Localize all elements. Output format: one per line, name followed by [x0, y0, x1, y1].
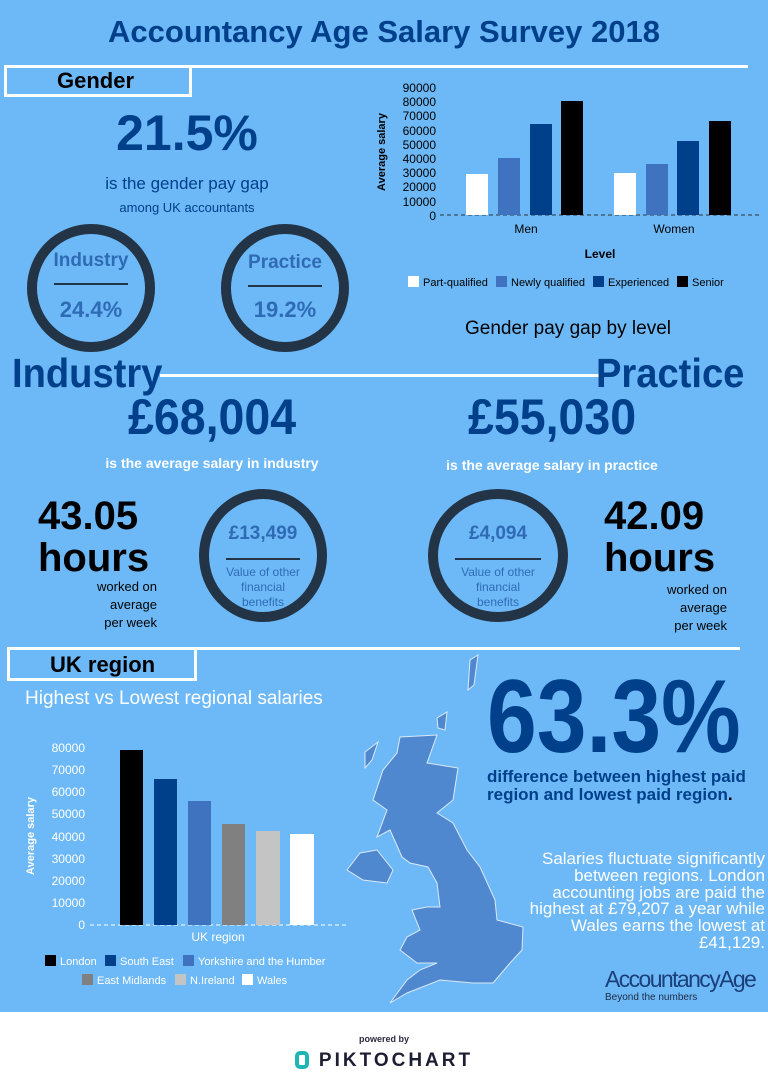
stat: practice salary: £55,030: [468, 389, 636, 445]
bar chart: regional salaries: 60000: [52, 785, 85, 799]
text: is the average salary in practice: [446, 457, 658, 473]
bar chart: gender pay gap by level: Experienced: [608, 277, 669, 289]
bar chart: regional salaries: [25, 741, 346, 987]
circle: practice benefits: £4,094: [469, 523, 527, 544]
map: UK: [346, 654, 524, 1004]
text: difference between highest paid: [487, 767, 746, 786]
bar chart: regional salaries: East Midlands: [97, 975, 167, 987]
heading: Gender: [4, 65, 192, 97]
circle: practice benefits: Value of other: [461, 565, 535, 579]
stat: industry hours: hours: [38, 536, 149, 580]
title: Accountancy Age Salary Survey 2018: [108, 14, 660, 49]
heading: UK region: [7, 647, 197, 681]
bar chart: gender pay gap by level: 60000: [403, 124, 436, 138]
heading: Industry: Industry: [12, 350, 162, 396]
bar chart: gender pay gap by level: 40000: [403, 152, 436, 166]
bar chart: regional salaries: Yorkshire and the Humber: [198, 956, 326, 968]
bar chart: regional salaries: 20000: [52, 874, 85, 888]
bar chart: regional salaries: 10000: [52, 896, 85, 910]
circle: practice gap: [221, 224, 349, 352]
stat: practice hours: per week: [674, 618, 727, 633]
circle: industry benefits: [199, 489, 327, 622]
heading: Practice: Practice: [596, 350, 744, 396]
footer: piktochart: powered by: [359, 1034, 409, 1044]
text block: regional summary: Wales earns the lowest at: [571, 916, 765, 935]
bar chart: regional salaries: 80000: [52, 741, 85, 755]
circle: practice benefits: financial: [476, 580, 520, 594]
bar chart: regional salaries: Wales: [257, 975, 288, 987]
bar chart: gender pay gap by level: Level: [585, 247, 615, 261]
bar chart: regional salaries: 0: [78, 918, 85, 932]
bar chart: gender pay gap by level: Average salary: [376, 112, 388, 191]
bar chart: gender pay gap by level: 50000: [403, 138, 436, 152]
bar chart: gender pay gap by level: Senior: [692, 277, 724, 289]
subheading: Highest vs Lowest regional salaries: [25, 688, 323, 709]
stat: practice hours: average: [680, 600, 727, 615]
bar chart: gender pay gap by level: Gender pay gap by level: [465, 318, 671, 339]
bar chart: gender pay gap by level: Men: [514, 222, 538, 236]
bar chart: gender pay gap by level: Newly qualified: [511, 277, 585, 289]
text block: regional summary: [530, 849, 765, 952]
bar chart: regional salaries: UK region: [191, 930, 245, 944]
bar chart: regional salaries: 50000: [52, 807, 85, 821]
heading: UK region: UK region: [50, 652, 155, 677]
bar chart: regional salaries: South East: [120, 956, 174, 968]
bar chart: gender pay gap by level: Part-qualified: [423, 277, 488, 289]
stat: practice hours: 42.09: [604, 494, 704, 538]
stat: industry hours: 43.05: [38, 494, 138, 538]
heading: Gender: Gender: [57, 68, 134, 93]
bar chart: regional salaries: N.Ireland: [190, 975, 235, 987]
stat: industry salary: £68,004: [128, 389, 296, 445]
stat: gender pay gap: is the gender pay gap: [105, 174, 269, 193]
bar chart: regional salaries: Average salary: [25, 796, 37, 875]
bar chart: regional salaries: 30000: [52, 852, 85, 866]
bar chart: regional salaries: London: [60, 956, 97, 968]
text block: regional summary: £41,129.: [699, 933, 765, 952]
logo: AccountancyAge: Beyond the numbers: [605, 992, 697, 1003]
stat: practice hours: worked on: [667, 582, 727, 597]
stat: practice hours: [604, 494, 727, 633]
bar chart: gender pay gap by level: 0: [429, 209, 436, 223]
circle: industry gap: Industry: [54, 250, 128, 271]
bar chart: gender pay gap by level: 70000: [403, 109, 436, 123]
stat: gender pay gap: 21.5%: [116, 105, 258, 161]
circle: industry benefits: financial: [241, 580, 285, 594]
circle: industry benefits: Value of other: [226, 565, 300, 579]
circle: industry gap: [27, 224, 155, 352]
circle: industry gap: 24.4%: [60, 297, 122, 322]
bar chart: gender pay gap by level: 80000: [403, 95, 436, 109]
stat: practice hours: hours: [604, 536, 715, 580]
text block: regional summary: between regions. London: [574, 866, 765, 885]
stat: industry hours: average: [110, 597, 157, 612]
stat: industry hours: [38, 494, 157, 630]
text block: regional summary: Salaries fluctuate significantly: [542, 849, 765, 868]
circle: industry benefits: £13,499: [229, 523, 297, 544]
stat: gender pay gap: among UK accountants: [119, 200, 255, 215]
stat: industry hours: per week: [104, 615, 157, 630]
text: region and lowest paid region.: [487, 785, 733, 804]
bar chart: regional salaries: 40000: [52, 830, 85, 844]
logo: AccountancyAge: [605, 966, 756, 1003]
bar chart: gender pay gap by level: 20000: [403, 180, 436, 194]
bar chart: gender pay gap by level: [376, 81, 759, 339]
logo: AccountancyAge: AccountancyAge: [605, 966, 755, 992]
bar chart: gender pay gap by level: 10000: [403, 195, 436, 209]
circle: practice gap: 19.2%: [254, 297, 316, 322]
stat: regional difference: 63.3%: [487, 659, 741, 775]
footer: piktochart: PIKTOCHART: [319, 1050, 473, 1071]
circle: practice benefits: [428, 489, 568, 622]
text: is the average salary in industry: [105, 455, 319, 471]
bar chart: gender pay gap by level: 90000: [403, 81, 436, 95]
circle: industry benefits: benefits: [242, 595, 284, 609]
bar chart: regional salaries: 70000: [52, 763, 85, 777]
circle: practice gap: Practice: [248, 252, 322, 273]
bar chart: gender pay gap by level: 30000: [403, 166, 436, 180]
footer: piktochart: [295, 1034, 473, 1071]
text block: regional summary: highest at £79,207 a year while: [530, 899, 765, 918]
text block: regional summary: accounting jobs are paid the: [552, 883, 765, 902]
circle: practice benefits: benefits: [477, 595, 519, 609]
stat: gender pay gap: [105, 105, 269, 215]
stat: industry hours: worked on: [97, 579, 157, 594]
bar chart: gender pay gap by level: Women: [653, 222, 695, 236]
